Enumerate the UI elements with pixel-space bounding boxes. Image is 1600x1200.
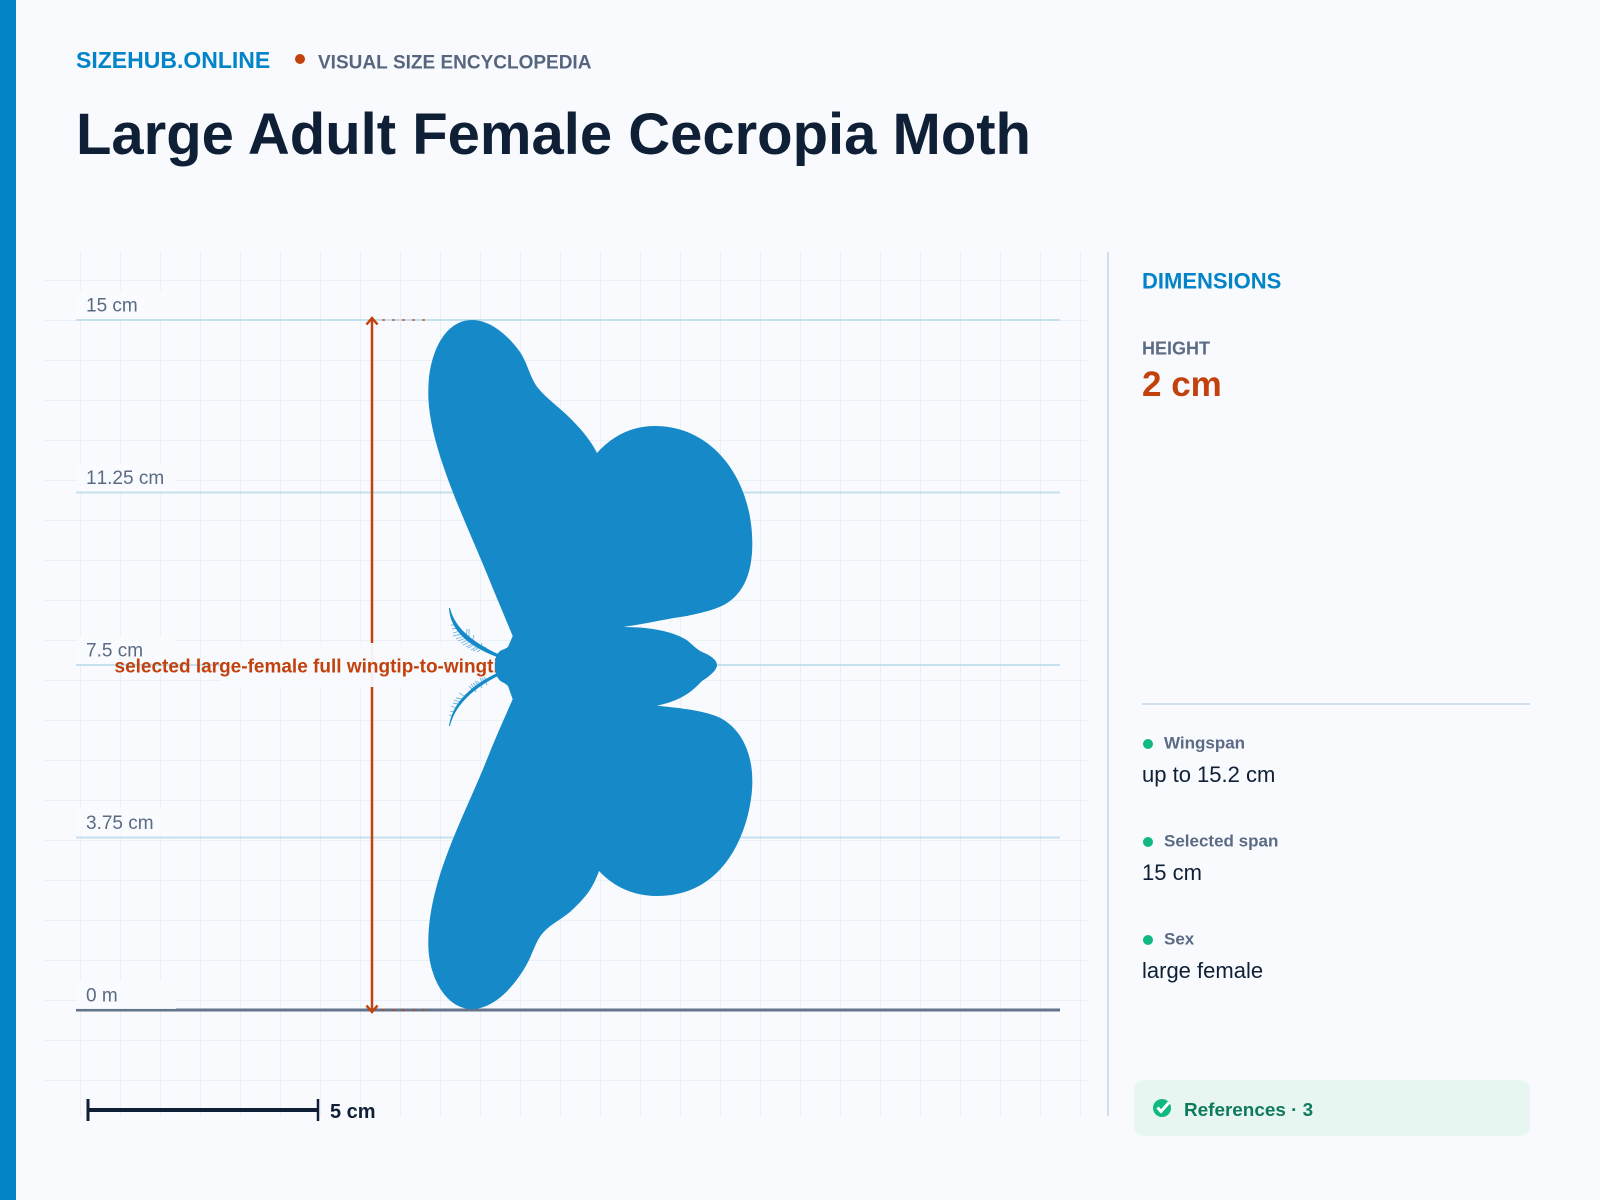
axis label: 7.5 cm — [76, 635, 176, 664]
height arrow — [366, 318, 426, 1012]
references badge — [1134, 1080, 1530, 1136]
baseline — [76, 1008, 1060, 1012]
axis label: 3.75 cm: 3.75 cm — [86, 813, 154, 834]
stat: sex: Sex — [1164, 930, 1195, 948]
accent bar — [0, 0, 16, 1200]
stat: selected span: Selected span — [1164, 832, 1278, 850]
axis label: 15 cm — [76, 290, 176, 319]
axis label: 15 cm: 15 cm — [86, 296, 138, 316]
antennae — [449, 608, 498, 726]
stat: selected span: 15 cm — [1142, 860, 1202, 885]
stat: wingspan — [1142, 734, 1275, 787]
panel heading: DIMENSIONS — [1142, 268, 1281, 294]
moth silhouette — [428, 320, 752, 1009]
height annotation: selected large-female full wingtip-to-wingtip span — [114, 656, 560, 678]
header: brand line: SIZEHUB.ONLINE — [76, 47, 270, 73]
height stat — [1142, 338, 1222, 404]
stat: sex: large female — [1142, 958, 1263, 983]
icon: check — [1153, 1099, 1171, 1117]
header: brand line: VISUAL SIZE ENCYCLOPEDIA — [318, 52, 592, 74]
axis label: 11.25 cm — [76, 462, 176, 492]
stat: wingspan: Wingspan — [1164, 734, 1245, 752]
title: Large Adult Female Cecropia Moth — [76, 102, 1031, 167]
axis label: 3.75 cm — [76, 808, 176, 836]
axis label: 0 m — [76, 980, 176, 1009]
axis label: 0 m: 0 m — [86, 986, 118, 1006]
stat: wingspan: up to 15.2 cm — [1142, 762, 1275, 787]
axis lines — [76, 320, 1060, 838]
references badge: References · 3 — [1184, 1100, 1313, 1121]
stat: sex — [1142, 930, 1263, 983]
height stat: 2 cm — [1142, 365, 1222, 404]
chart: size comparison — [44, 252, 1088, 1123]
axis label: 7.5 cm: 7.5 cm — [86, 640, 143, 662]
height stat: HEIGHT — [1142, 338, 1210, 358]
stat: selected span — [1142, 832, 1278, 885]
height annotation — [114, 643, 560, 687]
header: brand line — [76, 47, 592, 74]
scale bar: 5 cm — [330, 1101, 376, 1123]
panel: dimensions — [1108, 252, 1530, 1136]
axis label: 11.25 cm: 11.25 cm — [86, 468, 164, 489]
